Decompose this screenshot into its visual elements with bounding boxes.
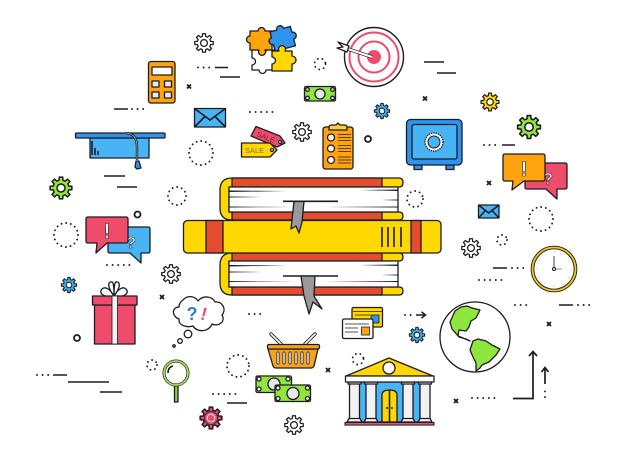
icon: envelope [194,108,226,127]
icon: clock [532,248,576,290]
icon: gear left [162,265,180,283]
bank door [382,390,397,422]
icon: white puzzle piece [252,50,278,74]
icon: bank building [345,358,434,425]
icon: banknote top [304,86,336,101]
icon: blue puzzle piece [266,22,299,52]
icon: blue gear right [409,327,425,343]
icon: front banknote [275,385,310,402]
icon: pink speech bubble: ? [543,171,553,188]
icon: yellow gear [481,93,499,111]
arrow: long elbow up [513,352,537,398]
icon: thought bubble [173,297,224,347]
icon: yellow sale tag: SALE [245,146,264,155]
South America [470,339,500,371]
icon: red speech bubble: ! [104,220,110,243]
icon: pink sale tag: SALE [255,130,276,145]
icon: thought bubble: ! [199,304,209,324]
middle book [184,220,441,253]
icon: shopping basket [268,334,320,368]
bottom book [220,253,403,295]
icon: blue speech bubble: ? [126,235,136,252]
top book [220,178,403,220]
arrow: short dotted up [542,368,548,397]
icon: orange speech bubble: ! [520,158,528,181]
icon: speech bubbles left [86,217,150,263]
icon: banknotes bottom [256,376,310,402]
icon: yellow card [352,308,382,327]
icon: gift box [92,282,137,344]
icon: top gear [195,34,213,52]
bank entablature [346,376,434,382]
bank roof [346,358,433,376]
icon: graduation cap [76,133,165,169]
bank wall [358,382,420,422]
icon: orange puzzle piece [246,28,272,55]
top bookmark [291,202,304,233]
icon: globe [440,302,510,372]
icon: white card [342,319,373,338]
icon: gear beside tags [293,123,311,141]
icon: blue gear top [374,103,390,119]
icon: small envelope [478,205,499,218]
central stack of books [184,178,441,314]
bottom bookmark [301,276,322,314]
icon: puzzle pieces [246,22,299,73]
icon: thought bubble: ? [186,304,198,324]
icon: gear bottom [285,416,303,434]
icon: magnifying glass [164,361,188,402]
icon: credit cards [342,308,382,338]
icon: yellow puzzle piece [272,46,296,71]
icon: clipboard checklist [323,123,353,169]
icon: target with arrow [337,28,404,86]
icon: red gear [200,407,222,429]
icon: green gear right [518,116,540,138]
bank pediment circle [383,362,395,374]
icon: safe [406,120,462,170]
bank columns [347,382,432,422]
arrow: dotted right [405,312,426,318]
icon: back banknote [256,376,292,392]
icon: sale tags [242,126,285,157]
North America [450,306,480,341]
decorative dashes, dots and rings [37,58,591,403]
icon: gear right [462,239,480,257]
icon: calculator [148,62,175,103]
icon: speech bubbles top right [503,154,567,199]
icon: green gear left [50,177,72,199]
bank base [345,422,434,425]
icon: blue gear left [61,277,77,293]
